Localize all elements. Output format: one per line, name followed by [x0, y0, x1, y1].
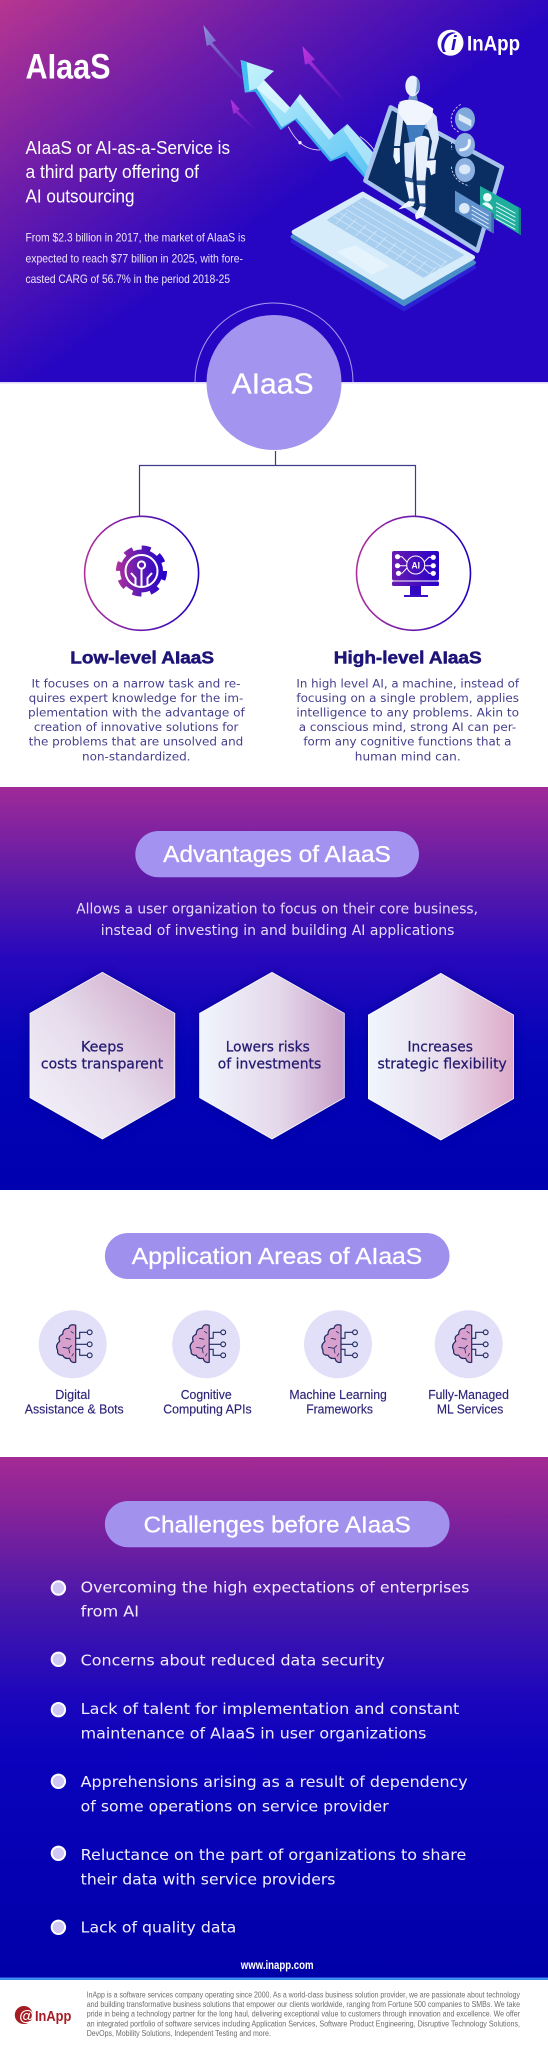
panel: challenges [0, 1457, 548, 1978]
heading pill: application areas [105, 1233, 450, 1279]
challenge 4: Apprehensions arising as a result of dependency [81, 1773, 468, 1791]
text: low-level description: plementation with the advantage of [28, 706, 246, 720]
definition text: AI outsourcing [26, 186, 134, 207]
laptop base [293, 194, 474, 309]
challenge 3: maintenance of AIaaS in user organizations [81, 1725, 427, 1743]
hexagon: increases flexibility: Increases [408, 1040, 473, 1056]
text: advantages intro [76, 901, 478, 939]
high-level circle with monitor icon [356, 516, 470, 630]
market statistics text: From $2.3 billion in 2017, the market of AIaaS is [26, 232, 246, 245]
panel: application areas [0, 1190, 548, 1457]
text: low-level description: It focuses on a narrow task and re- [32, 676, 240, 690]
heading: high-level: High-level AIaaS [334, 647, 482, 667]
heading pill: application areas: Application Areas of AIaaS [132, 1243, 422, 1269]
growth arrow [241, 60, 374, 182]
challenge 2: Concerns about reduced data security [81, 1651, 385, 1669]
item: digital assistance: Assistance & Bots [25, 1401, 124, 1416]
hexagon: keeps costs transparent: costs transparent [41, 1057, 164, 1073]
panel: header [0, 0, 548, 382]
panel: advantages [0, 787, 548, 1190]
challenge 5: Reluctance on the part of organizations to share [81, 1846, 466, 1864]
market statistics text [26, 232, 246, 286]
heading pill: challenges [105, 1501, 450, 1547]
definition text: AIaaS or AI-as-a-Service is [26, 137, 230, 158]
company description [87, 1990, 520, 2038]
challenge 3: Lack of talent for implementation and constant [81, 1700, 459, 1718]
item: machine learning: Frameworks [306, 1401, 373, 1416]
item: machine learning: Machine Learning [289, 1387, 387, 1402]
arrows and laptop base [203, 25, 375, 182]
item: fully managed: ML Services [437, 1401, 504, 1416]
logo: InApp red [15, 2006, 71, 2025]
hexagon: increases flexibility [368, 973, 514, 1140]
challenge 3 [52, 1700, 459, 1743]
text: high-level description: human mind can. [355, 749, 461, 763]
illustration: laptop, robot and growth arrow [203, 25, 521, 309]
challenge 4: of some operations on service provider [81, 1798, 390, 1816]
text: low-level description: the problems that are unsolved and [29, 735, 243, 749]
laptop screen [365, 107, 502, 251]
market statistics text: expected to reach $77 billion in 2025, with fore- [26, 252, 243, 265]
arrow: magenta small [231, 99, 256, 130]
item: cognitive computing: Computing APIs [163, 1401, 252, 1416]
item: fully managed [428, 1310, 509, 1416]
heading: low-level: Low-level AIaaS [70, 647, 214, 667]
hexagon: keeps costs transparent [30, 972, 175, 1139]
logo: InApp red: @ [19, 2008, 34, 2025]
heading pill: challenges: Challenges before AIaaS [144, 1511, 411, 1537]
cards [455, 186, 521, 235]
logo: InApp red: InApp [35, 2008, 71, 2025]
item: digital assistance: Digital [55, 1387, 90, 1402]
icon: gear circuit [119, 548, 164, 594]
logo: InApp white: InApp [467, 33, 520, 56]
challenge 5: their data with service providers [81, 1870, 336, 1888]
heading pill: advantages: Advantages of AIaaS [163, 841, 391, 867]
connector lines [140, 451, 416, 516]
logo: InApp white [438, 30, 520, 56]
definition text: a third party offering of [26, 161, 200, 182]
text: low-level description: quires expert knowledge for the im- [29, 691, 243, 705]
hexagon: increases flexibility: strategic flexibility [378, 1057, 507, 1073]
item: digital assistance [25, 1310, 124, 1416]
arrow: magenta large [302, 46, 346, 102]
hexagon: lowers risks: of investments [218, 1057, 321, 1073]
logo: InApp white: i [451, 33, 457, 55]
connector curves [288, 127, 375, 152]
central circle: AIaaS [232, 368, 314, 400]
arc around central circle [195, 303, 353, 382]
low-level circle with gear icon [85, 516, 199, 630]
hexagon: keeps costs transparent: Keeps [81, 1040, 124, 1056]
hexagon: lowers risks [200, 972, 344, 1139]
icons: mail, phone, chat [451, 104, 475, 186]
text: high-level description: form any cognitive functions that a [303, 735, 511, 749]
item: machine learning [289, 1310, 387, 1416]
text: low-level description [28, 676, 246, 763]
panel: AIaaS types [0, 303, 548, 787]
challenge 1 [52, 1578, 470, 1621]
text: low-level description: non-standardized. [82, 749, 190, 763]
market statistics text: casted CARG of 56.7% in the period 2018-25 [26, 273, 230, 286]
text: high-level description: intelligence to any problems. Akin to [296, 706, 519, 720]
item: cognitive computing: Cognitive [181, 1387, 232, 1402]
text: high-level description [296, 676, 520, 763]
central circle [206, 315, 342, 450]
heading pill: advantages [135, 831, 419, 877]
definition text [26, 137, 230, 207]
challenge 6: Lack of quality data [81, 1919, 236, 1937]
website url: www.inapp.com [240, 1958, 314, 1972]
item: fully managed: Fully-Managed [428, 1387, 509, 1402]
panel: footer [0, 1978, 548, 2048]
item: cognitive computing [163, 1310, 252, 1416]
challenge 4 [52, 1773, 468, 1816]
text: advantages intro: Allows a user organization to focus on their core business, [76, 901, 478, 917]
challenge 1: Overcoming the high expectations of enterprises [81, 1578, 470, 1596]
text: high-level description: In high level AI, a machine, instead of [296, 676, 520, 690]
icon: AI monitor: AI [412, 560, 420, 570]
company description: DevOps, Mobility Solutions, Independent Testing and more. [87, 2029, 271, 2038]
text: high-level description: focusing on a single problem, applies [296, 691, 519, 705]
robot [393, 76, 439, 219]
text: advantages intro: instead of investing in and building AI applications [101, 923, 454, 939]
arrow: grey-blue [203, 25, 243, 79]
text: low-level description: creation of innovative solutions for [34, 720, 239, 734]
challenge 5 [52, 1846, 466, 1888]
title: AIaaS [26, 47, 110, 86]
hexagon: lowers risks: Lowers risks [226, 1040, 310, 1056]
challenge 1: from AI [81, 1603, 139, 1621]
text: high-level description: a conscious mind, strong AI can per- [299, 720, 516, 734]
